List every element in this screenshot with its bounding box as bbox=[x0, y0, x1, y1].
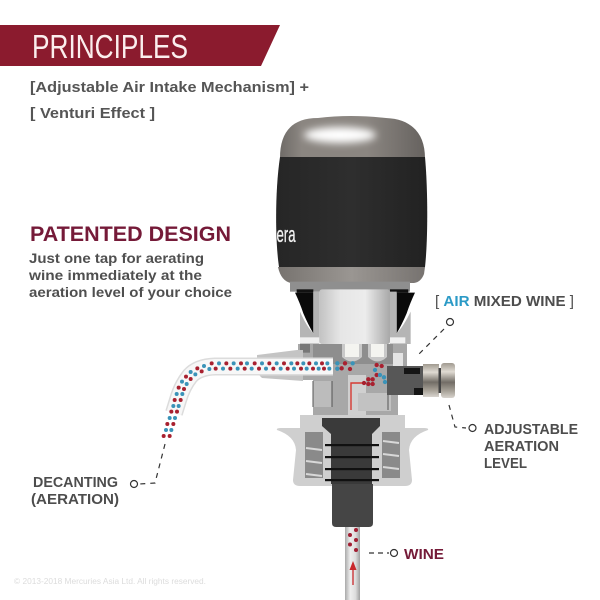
callout: decanting: (AERATION) bbox=[31, 492, 119, 508]
wine dots in tube bbox=[348, 528, 358, 552]
bottom wine tube bbox=[345, 527, 360, 600]
patented design heading: PATENTED DESIGN bbox=[30, 223, 231, 246]
mixing chamber body bbox=[298, 344, 407, 416]
spout flange bbox=[257, 350, 303, 381]
device black sleeve bbox=[276, 157, 427, 267]
patented design description bbox=[28, 250, 232, 300]
brand mark: era bbox=[276, 222, 296, 247]
callout: adjustable aeration level: AERATION bbox=[484, 439, 559, 455]
patented design description: aeration level of your choice bbox=[29, 284, 232, 300]
callout: decanting: DECANTING bbox=[33, 475, 118, 491]
subtitle: [Adjustable Air Intake Mechanism] + bbox=[30, 79, 309, 96]
aerated wine dots bbox=[162, 361, 331, 438]
wine flow arrow bbox=[350, 561, 356, 585]
title banner bbox=[0, 25, 280, 66]
mixing dots in chamber bbox=[335, 361, 387, 386]
internal cutaway bbox=[174, 282, 455, 416]
callout: wine: WINE bbox=[404, 547, 444, 563]
air flow arrow in chamber bbox=[351, 383, 364, 410]
subtitle bbox=[30, 79, 309, 122]
title banner: PRINCIPLES bbox=[32, 28, 188, 65]
callout: decanting bbox=[31, 444, 165, 508]
black rubber stopper bbox=[322, 418, 380, 527]
callout: air mixed wine bbox=[417, 294, 574, 356]
device lower band bbox=[278, 267, 425, 283]
callout: adjustable aeration level: ADJUSTABLE bbox=[484, 422, 578, 438]
upper housing bbox=[290, 282, 415, 353]
copyright: © 2013-2018 Mercuries Asia Ltd. All rights reserved. bbox=[14, 577, 206, 586]
stopper base bbox=[277, 415, 428, 486]
device cap bbox=[280, 116, 425, 158]
callout: adjustable aeration level bbox=[449, 405, 578, 472]
aerator device bbox=[162, 116, 455, 600]
callout: air mixed wine: [ AIR MIXED WINE ] bbox=[435, 294, 574, 310]
air inlet ports bbox=[342, 344, 387, 362]
patented design description: wine immediately at the bbox=[28, 267, 202, 283]
callout: adjustable aeration level: LEVEL bbox=[484, 456, 527, 472]
adjustable air knob bbox=[387, 363, 455, 398]
callout: wine bbox=[369, 547, 444, 563]
patented design description: Just one tap for aerating bbox=[29, 250, 204, 266]
spout tube bbox=[174, 366, 333, 413]
subtitle: [ Venturi Effect ] bbox=[30, 105, 155, 122]
